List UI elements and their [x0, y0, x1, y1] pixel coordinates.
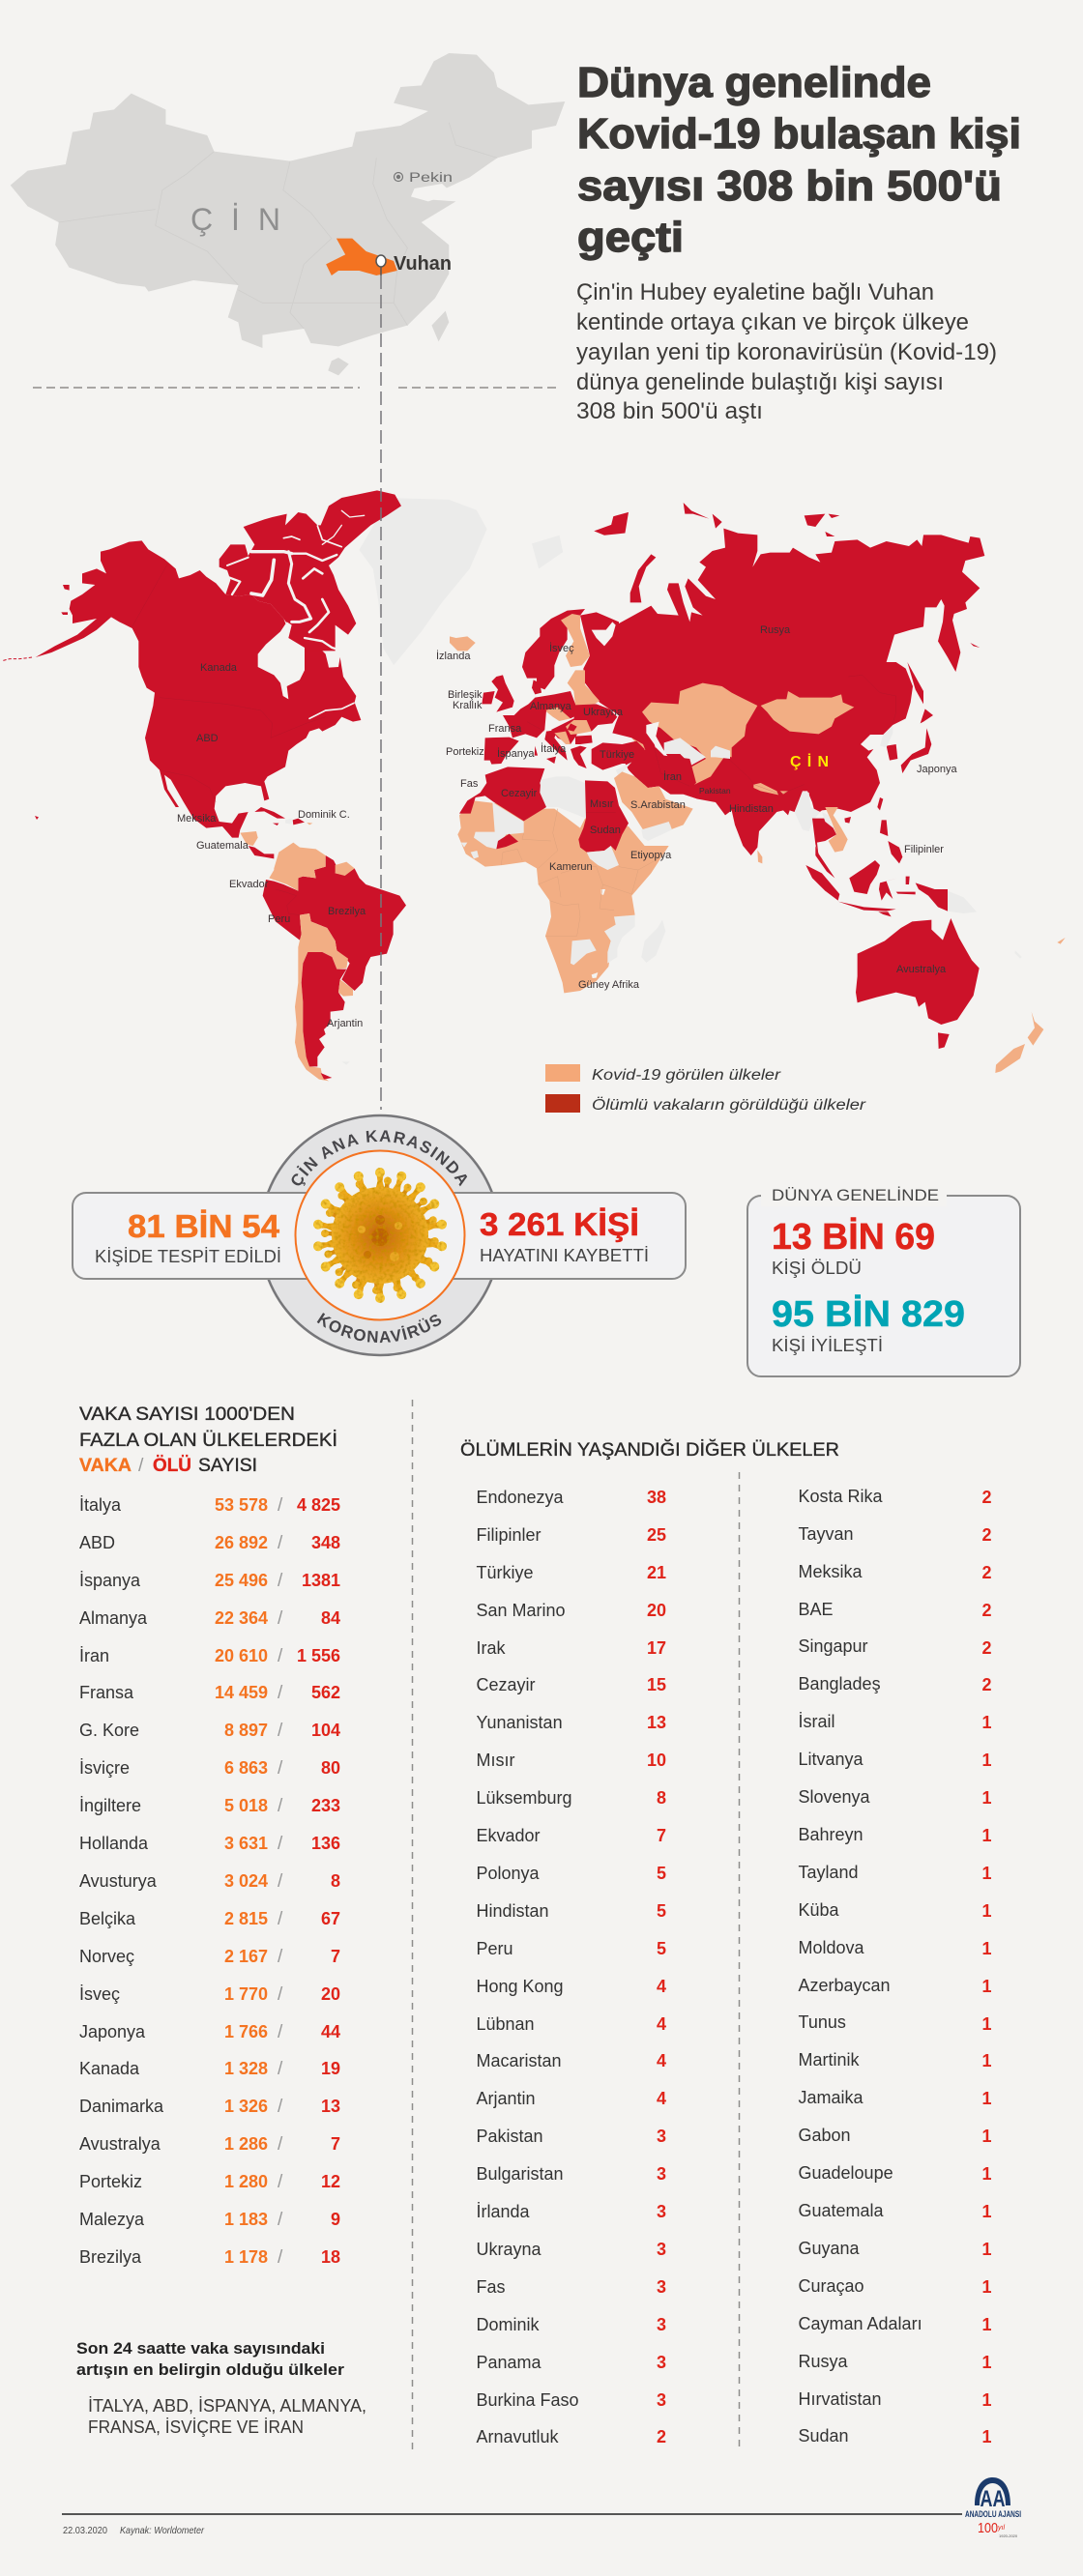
table: cases and deaths by country: Malezya: [79, 2210, 145, 2229]
table: deaths list column 1: 5: [657, 1901, 666, 1921]
map country labels: Etiyopya: [630, 850, 672, 861]
table: cases and deaths by country: Avusturya: [79, 1871, 158, 1891]
landmass: Africa: [457, 767, 669, 993]
table: cases and deaths by country: 25 496: [215, 1571, 268, 1590]
map country labels: İsveç: [549, 642, 574, 654]
table: cases and deaths by country: /: [278, 1683, 283, 1703]
table: cases and deaths by country: 80: [321, 1758, 340, 1778]
heading: other countries with deaths: ÖLÜMLERİN YAŞANDIĞI DİĞER ÜLKELER: [460, 1438, 839, 1461]
map country labels: Kamerun: [549, 861, 593, 873]
map country labels: Ç İ N: [790, 753, 829, 770]
table: cases and deaths by country: 2 815: [224, 1909, 268, 1928]
table: cases and deaths by country: 13: [321, 2097, 340, 2116]
table: deaths list column 1: Panama: [476, 2353, 542, 2372]
table: deaths list column 2: 1: [981, 2240, 992, 2259]
table: cases and deaths by country: Kanada: [79, 2059, 140, 2078]
table: deaths list column 2: 1: [981, 1713, 992, 1732]
map country labels: Güney Afrika: [578, 979, 640, 991]
table: deaths list column 1: 4: [657, 1977, 666, 1996]
table: deaths list column 1: 3: [657, 2164, 666, 2184]
table: cases and deaths by country: /: [278, 1721, 283, 1741]
table: cases and deaths by country: 8: [331, 1871, 340, 1891]
map country labels: [177, 624, 957, 1029]
table: cases and deaths by country: Almanya: [79, 1608, 148, 1628]
table: cases and deaths by country: 136: [311, 1834, 340, 1853]
table: deaths list column 1: Bulgaristan: [476, 2164, 564, 2184]
table: deaths list column 2: Guyana: [799, 2239, 861, 2258]
map country labels: Peru: [268, 913, 290, 925]
table: deaths list column 1: 3: [657, 2390, 666, 2410]
map country labels: Mısır: [590, 798, 614, 810]
map country labels: Arjantin: [327, 1018, 363, 1029]
heading: countries over 1000 cases: ÖLÜ: [153, 1454, 191, 1476]
table: cases and deaths by country: 20 610: [215, 1646, 268, 1665]
intro paragraph: [576, 279, 997, 424]
table: deaths list column 2: Guatemala: [799, 2201, 885, 2220]
table: deaths list column 1: Ekvador: [476, 1826, 541, 1845]
table: cases and deaths by country: 5 018: [224, 1796, 268, 1815]
map country labels: Birleşik: [448, 689, 483, 701]
table: deaths list column 1: Türkiye: [476, 1563, 534, 1582]
table: deaths list column 2: Cayman Adaları: [799, 2314, 922, 2333]
table: deaths list column 2: 1: [981, 1826, 992, 1845]
landmass: Europe and Middle East: [450, 609, 699, 841]
table: cases and deaths by country: Belçika: [79, 1909, 136, 1928]
table: cases and deaths by country: Hollanda: [79, 1834, 149, 1853]
table: deaths list column 1: 3: [657, 2127, 666, 2146]
callout: largest 24-hour increases: FRANSA, İSVİÇRE VE İRAN: [88, 2417, 304, 2437]
table: deaths list column 2: Slovenya: [799, 1787, 871, 1807]
table: deaths list column 1: Arnavutluk: [476, 2427, 560, 2446]
table: deaths list column 2: Kosta Rika: [799, 1487, 884, 1506]
table: cases and deaths by country: İspanya: [79, 1571, 141, 1590]
label: Wuhan: Vuhan: [394, 253, 452, 275]
map country labels: Krallık: [453, 700, 483, 711]
table: deaths list column 1: Ukrayna: [476, 2240, 542, 2259]
table: deaths list column 2: 1: [981, 2427, 992, 2446]
table: deaths list column 1: Filipinler: [476, 1525, 542, 1545]
table: cases and deaths by country: 1 286: [224, 2134, 268, 2154]
footer: date and source: 22.03.2020: [63, 2525, 107, 2536]
table: cases and deaths by country: Brezilya: [79, 2247, 142, 2267]
stat: deaths in China: HAYATINI KAYBETTİ: [480, 1246, 649, 1265]
heading: countries over 1000 cases: VAKA SAYISI 1000'DEN: [79, 1404, 295, 1425]
stat: cases in China: KİŞİDE TESPİT EDİLDİ: [95, 1247, 281, 1266]
table: cases and deaths by country: 67: [321, 1909, 340, 1928]
curved label: mainland China: ÇİN ANA KARASINDA: [292, 1130, 468, 1187]
map country labels: Rusya: [760, 624, 791, 636]
inner circle: [296, 1150, 464, 1320]
table: cases and deaths by country: 1 280: [224, 2172, 268, 2191]
table: deaths list column 1: 4: [657, 2051, 666, 2070]
map legend: [545, 1064, 866, 1114]
table: cases and deaths by country: 1 556: [297, 1646, 340, 1665]
table: deaths list column 1: Peru: [476, 1939, 513, 1958]
footer: date and source: [63, 2525, 204, 2536]
table: deaths list column 1: 3: [657, 2277, 666, 2297]
table: deaths list column 1: 3: [657, 2202, 666, 2221]
table: deaths list column 1: 25: [647, 1525, 666, 1545]
table: cases and deaths by country: 12: [321, 2172, 340, 2191]
table: cases and deaths by country: /: [278, 2059, 283, 2079]
intro paragraph: Çin'in Hubey eyaletine bağlı Vuhan: [576, 279, 934, 305]
table: deaths list column 1: Endonezya: [476, 1488, 565, 1507]
table: deaths list column 2: 1: [981, 2353, 992, 2372]
table: cases and deaths by country: /: [278, 2247, 283, 2268]
table: cases and deaths by country: /: [278, 1608, 283, 1629]
table: deaths list column 2: 2: [981, 1638, 992, 1658]
table: deaths list column 1: 10: [647, 1751, 666, 1770]
heading: countries over 1000 cases: SAYISI: [198, 1455, 257, 1476]
table: cases and deaths by country: /: [278, 1834, 283, 1854]
table: cases and deaths by country: 6 863: [224, 1758, 268, 1778]
table: cases and deaths by country: 233: [311, 1796, 340, 1815]
callout: largest 24-hour increases: [76, 2339, 366, 2437]
table: cases and deaths by country: [79, 1495, 340, 2268]
table: cases and deaths by country: 1 326: [224, 2097, 268, 2116]
map legend: Kovid-19 görülen ülkeler: [592, 1067, 781, 1084]
table: cases and deaths by country: /: [278, 1571, 283, 1591]
table: deaths list column 1: 3: [657, 2315, 666, 2334]
table: cases and deaths by country: 4 825: [297, 1495, 340, 1515]
table: deaths list column 1: 17: [647, 1638, 666, 1658]
table: deaths list column 2: 1: [981, 1751, 992, 1770]
map country labels: İzlanda: [436, 650, 471, 662]
table: deaths list column 1: Irak: [476, 1638, 507, 1658]
table: cases and deaths by country: 22 364: [215, 1608, 268, 1628]
table: cases and deaths by country: /: [278, 2172, 283, 2192]
map country labels: Sudan: [590, 825, 621, 836]
stat: deaths in China: 3 261 KİŞİ: [480, 1206, 639, 1242]
table: cases and deaths by country: Danimarka: [79, 2097, 164, 2116]
map country labels: Ukrayna: [583, 707, 624, 718]
table: cases and deaths by country: 1381: [302, 1571, 340, 1590]
table: deaths list column 2: Singapur: [799, 1636, 868, 1656]
table: deaths list column 2: 2: [981, 1488, 992, 1507]
map country labels: Hindistan: [729, 803, 774, 815]
table: cases and deaths by country: İtalya: [79, 1495, 122, 1515]
table: cases and deaths by country: /: [278, 1984, 283, 2005]
title: Kovid-19 bulaşan kişi: [577, 110, 1021, 158]
panel heading: DÜNYA GENELİNDE: [772, 1186, 939, 1204]
intro paragraph: 308 bin 500'ü aştı: [576, 398, 763, 424]
table: cases and deaths by country: 348: [311, 1533, 340, 1552]
landmass: Greenland and Svalbard: [359, 498, 629, 665]
table: cases and deaths by country: 44: [321, 2022, 340, 2041]
table: deaths list column 2: Tayland: [799, 1863, 859, 1882]
landmass: Southeast Asia and Oceania: [805, 820, 1066, 1073]
landmass: South America: [263, 843, 406, 1081]
callout: largest 24-hour increases: İTALYA, ABD, İSPANYA, ALMANYA,: [88, 2396, 366, 2416]
table: deaths list column 2: Küba: [799, 1900, 840, 1920]
map country labels: Meksika: [177, 813, 217, 825]
curved label: coronavirus: KORONAVİRÜS: [317, 1313, 441, 1344]
table: cases and deaths by country: /: [278, 1796, 283, 1816]
map country labels: ABD: [196, 733, 219, 744]
table: cases and deaths by country: G. Kore: [79, 1721, 139, 1740]
panel: mainland China badge: [72, 1114, 687, 1357]
table: deaths list column 1: 2: [657, 2427, 666, 2446]
table: deaths list column 1: Dominik: [476, 2315, 541, 2334]
logo: Anadolu Ajansı: ANADOLU AJANSI: [965, 2509, 1021, 2519]
table: deaths list column 2: 1: [981, 2315, 992, 2334]
table: cases and deaths by country: /: [278, 2022, 283, 2042]
table: deaths list column 1: 4: [657, 2089, 666, 2108]
map country labels: İran: [663, 770, 682, 783]
stat: worldwide recoveries: 95 BİN 829: [772, 1294, 965, 1335]
table: deaths list column 2: Meksika: [799, 1562, 863, 1581]
map country labels: Ekvador: [229, 879, 269, 890]
table: deaths list column 1: Hindistan: [476, 1901, 549, 1921]
table: deaths list column 2: 1: [981, 2051, 992, 2070]
table: deaths list column 1: 4: [657, 2014, 666, 2034]
table: deaths list column 1: 3: [657, 2240, 666, 2259]
table: deaths list column 2: Bangladeş: [799, 1674, 881, 1693]
table: deaths list column 2: Litvanya: [799, 1750, 864, 1769]
table: deaths list column 1: Mısır: [476, 1751, 514, 1770]
stat: cases in China: [95, 1208, 281, 1266]
table: cases and deaths by country: 20: [321, 1984, 340, 2004]
heading: countries over 1000 cases: VAKA: [79, 1455, 132, 1476]
map country labels: Brezilya: [328, 906, 366, 917]
table: cases and deaths by country: 1 766: [224, 2022, 268, 2041]
map country labels: S.Arabistan: [630, 799, 686, 811]
table: deaths list column 1: Pakistan: [476, 2127, 543, 2146]
table: cases and deaths by country: Norveç: [79, 1947, 134, 1966]
table: cases and deaths by country: 1 178: [224, 2247, 268, 2267]
table: cases and deaths by country: 1 183: [224, 2210, 268, 2229]
table: deaths list column 1: İrlanda: [476, 2202, 531, 2221]
table: cases and deaths by country: 14 459: [215, 1683, 268, 1702]
table: cases and deaths by country: 562: [311, 1683, 340, 1702]
label: Beijing: Pekin: [409, 169, 453, 185]
table: deaths list column 1: Lüksemburg: [476, 1788, 572, 1808]
table: cases and deaths by country: 8 897: [224, 1721, 268, 1740]
table: cases and deaths by country: /: [278, 1533, 283, 1553]
table: deaths list column 2: İsrail: [799, 1712, 835, 1731]
map country labels: Türkiye: [600, 749, 634, 761]
map country labels: İspanya: [497, 747, 535, 760]
logo: Anadolu Ajansı: 1920-2020: [999, 2533, 1018, 2538]
table: cases and deaths by country: 3 024: [224, 1871, 268, 1891]
heading: countries over 1000 cases: /: [138, 1455, 144, 1476]
table: deaths list column 2: Curaçao: [799, 2276, 864, 2296]
table: cases and deaths by country: Avustralya: [79, 2134, 161, 2154]
table: deaths list column 2: 2: [981, 1675, 992, 1694]
table: deaths list column 2: Tunus: [799, 2012, 846, 2032]
table: cases and deaths by country: Portekiz: [79, 2172, 142, 2191]
table: deaths list column 1: Hong Kong: [476, 1977, 564, 1996]
table: cases and deaths by country: 104: [311, 1721, 340, 1740]
table: deaths list column 2: 1: [981, 1939, 992, 1958]
table: cases and deaths by country: 19: [321, 2059, 340, 2078]
table: deaths list column 1: 21: [647, 1563, 666, 1582]
table: cases and deaths by country: 84: [321, 1608, 340, 1628]
table: cases and deaths by country: /: [278, 1758, 283, 1779]
table: deaths list column 1: Macaristan: [476, 2051, 562, 2070]
table: cases and deaths by country: /: [278, 2210, 283, 2230]
table: deaths list column 2: Rusya: [799, 2352, 849, 2371]
map: China with Hubei highlighted: [11, 53, 565, 375]
table: deaths list column 1: 5: [657, 1939, 666, 1958]
map country labels: İtalya: [541, 742, 567, 755]
title: sayısı 308 bin 500'ü: [577, 162, 1002, 210]
table: cases and deaths by country: İran: [79, 1646, 109, 1665]
table: cases and deaths by country: /: [278, 2097, 283, 2117]
table: cases and deaths by country: 7: [331, 2134, 340, 2154]
table: deaths list column 1: Cezayir: [476, 1675, 536, 1694]
table: deaths list column 2: Guadeloupe: [799, 2163, 893, 2183]
logo: Anadolu Ajansı: 100: [978, 2520, 998, 2536]
table: deaths list column 2: Gabon: [799, 2126, 851, 2145]
table: cases and deaths by country: /: [278, 2134, 283, 2155]
table: deaths list column 2: Martinik: [799, 2050, 861, 2069]
table: cases and deaths by country: /: [278, 1646, 283, 1666]
panel: worldwide totals: [747, 1186, 1020, 1376]
map country labels: Pakistan: [699, 786, 731, 796]
table: cases and deaths by country: 2 167: [224, 1947, 268, 1966]
table: cases and deaths by country: 1 328: [224, 2059, 268, 2078]
stat: worldwide recoveries: [772, 1294, 965, 1355]
table: deaths list column 1: 20: [647, 1601, 666, 1620]
table: deaths list column 1: Fas: [476, 2277, 506, 2297]
intro paragraph: yayılan yeni tip koronavirüsün (Kovid-19): [576, 339, 997, 365]
table: cases and deaths by country: İsveç: [79, 1984, 120, 2004]
table: deaths list column 2: Tayvan: [799, 1524, 854, 1544]
table: cases and deaths by country: /: [278, 1495, 283, 1516]
title: Dünya genelinde: [577, 59, 931, 106]
table: cases and deaths by country: /: [278, 1909, 283, 1929]
landmass: Asia: [580, 503, 984, 863]
stat: worldwide deaths: KİŞİ ÖLDÜ: [772, 1259, 862, 1278]
table: deaths list column 1: [476, 1488, 666, 2446]
table: cases and deaths by country: 53 578: [215, 1495, 268, 1515]
table: deaths list column 2: BAE: [799, 1600, 834, 1619]
heading: countries over 1000 cases: [79, 1404, 337, 1476]
table: cases and deaths by country: /: [278, 1947, 283, 1967]
map country labels: Guatemala: [196, 840, 249, 852]
map legend: Ölümlü vakaların görüldüğü ülkeler: [592, 1096, 866, 1114]
footer: date and source: Kaynak: Worldometer: [120, 2525, 204, 2536]
stat: worldwide deaths: [772, 1217, 935, 1278]
table: deaths list column 2: [799, 1487, 992, 2446]
heading: countries over 1000 cases: FAZLA OLAN ÜLKELERDEKİ: [79, 1429, 337, 1451]
table: deaths list column 1: Polonya: [476, 1864, 541, 1883]
intro paragraph: dünya genelinde bulaştığı kişi sayısı: [576, 369, 944, 395]
callout: largest 24-hour increases: artışın en belirgin olduğu ülkeler: [76, 2360, 344, 2379]
table: deaths list column 2: 1: [981, 2014, 992, 2034]
map country labels: Kanada: [200, 662, 238, 674]
table: cases and deaths by country: 7: [331, 1947, 340, 1966]
label: China: Ç İ N: [190, 202, 280, 237]
table: deaths list column 2: 2: [981, 1601, 992, 1620]
table: deaths list column 1: 13: [647, 1713, 666, 1732]
map country labels: Avustralya: [896, 964, 947, 975]
table: deaths list column 2: 1: [981, 2127, 992, 2146]
landmass: North America: [3, 490, 401, 858]
table: cases and deaths by country: 3 631: [224, 1834, 268, 1853]
table: deaths list column 1: 38: [647, 1488, 666, 1507]
map country labels: Filipinler: [904, 844, 944, 855]
table: cases and deaths by country: ABD: [79, 1533, 115, 1552]
table: cases and deaths by country: 18: [321, 2247, 340, 2267]
icon: Wuhan pin: [376, 255, 386, 275]
table: cases and deaths by country: 9: [331, 2210, 340, 2229]
table: cases and deaths by country: 1 770: [224, 1984, 268, 2004]
icon: coronavirus: [312, 1168, 448, 1303]
title: geçti: [577, 214, 684, 261]
label: Beijing: [395, 169, 453, 185]
map country labels: Almanya: [530, 701, 572, 712]
table: cases and deaths by country: İngiltere: [79, 1796, 141, 1815]
map country labels: Fas: [460, 778, 479, 790]
stat: worldwide recoveries: KİŞİ İYİLEŞTİ: [772, 1336, 883, 1355]
title: [577, 59, 1021, 261]
table: deaths list column 2: 1: [981, 1901, 992, 1921]
logo: Anadolu Ajansı: yıl: [997, 2525, 1005, 2532]
table: deaths list column 1: 8: [657, 1788, 666, 1808]
table: deaths list column 1: Lübnan: [476, 2014, 535, 2034]
table: deaths list column 2: Jamaika: [799, 2088, 864, 2107]
table: deaths list column 1: 3: [657, 2353, 666, 2372]
table: cases and deaths by country: İsviçre: [79, 1758, 130, 1778]
stat: worldwide deaths: 13 BİN 69: [772, 1217, 935, 1258]
logo: Anadolu Ajansı: AA: [981, 2486, 1006, 2512]
map country labels: Portekiz: [446, 746, 484, 758]
map country labels: Japonya: [917, 764, 957, 775]
table: deaths list column 1: Yunanistan: [476, 1713, 563, 1732]
table: deaths list column 1: Burkina Faso: [476, 2390, 579, 2410]
table: deaths list column 2: 1: [981, 1864, 992, 1883]
table: cases and deaths by country: 26 892: [215, 1533, 268, 1552]
intro paragraph: kentinde ortaya çıkan ve birçok ülkeye: [576, 309, 969, 335]
table: deaths list column 2: 1: [981, 2202, 992, 2221]
map country labels: Dominik C.: [298, 809, 350, 821]
table: deaths list column 1: 7: [657, 1826, 666, 1845]
table: deaths list column 2: 1: [981, 2390, 992, 2410]
table: deaths list column 2: 2: [981, 1525, 992, 1545]
stat: deaths in China: [480, 1206, 649, 1265]
table: deaths list column 2: 1: [981, 2277, 992, 2297]
table: deaths list column 2: Bahreyn: [799, 1825, 863, 1844]
callout: largest 24-hour increases: Son 24 saatte vaka sayısındaki: [76, 2339, 325, 2358]
table: deaths list column 1: 15: [647, 1675, 666, 1694]
table: deaths list column 2: 1: [981, 2164, 992, 2184]
table: deaths list column 2: Moldova: [799, 1938, 865, 1957]
table: deaths list column 2: 1: [981, 1977, 992, 1996]
stat: cases in China: 81 BİN 54: [128, 1208, 280, 1244]
table: deaths list column 1: 5: [657, 1864, 666, 1883]
map country labels: Fransa: [488, 723, 522, 735]
table: deaths list column 2: 2: [981, 1563, 992, 1582]
map country labels: Cezayir: [501, 788, 538, 799]
table: deaths list column 2: Sudan: [799, 2426, 849, 2446]
table: cases and deaths by country: Japonya: [79, 2022, 146, 2041]
table: deaths list column 2: 1: [981, 1788, 992, 1808]
table: deaths list column 2: Hırvatistan: [799, 2389, 882, 2409]
table: deaths list column 2: Azerbaycan: [799, 1976, 891, 1995]
table: deaths list column 1: Arjantin: [476, 2089, 536, 2108]
panel: world map: [3, 490, 1066, 1081]
table: deaths list column 2: 1: [981, 2089, 992, 2108]
table: cases and deaths by country: /: [278, 1871, 283, 1892]
logo: Anadolu Ajansı: [965, 2477, 1021, 2538]
table: deaths list column 1: San Marino: [476, 1601, 566, 1620]
table: cases and deaths by country: Fransa: [79, 1683, 134, 1702]
